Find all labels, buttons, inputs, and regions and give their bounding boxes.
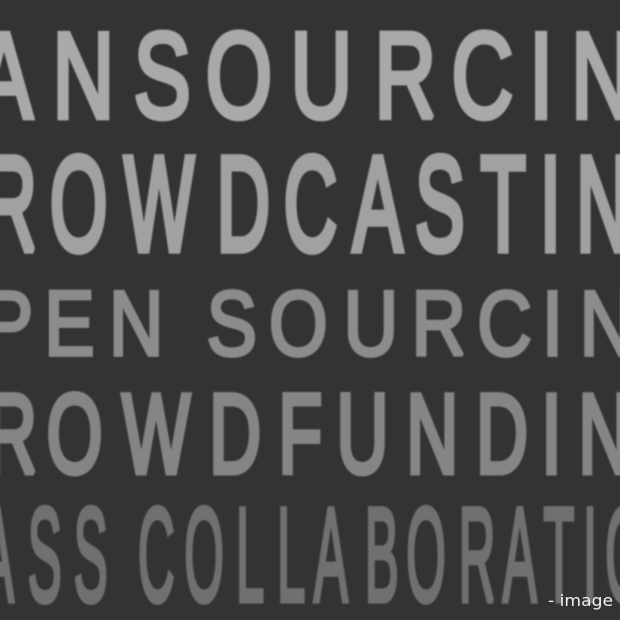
caption: - image [548,591,613,610]
